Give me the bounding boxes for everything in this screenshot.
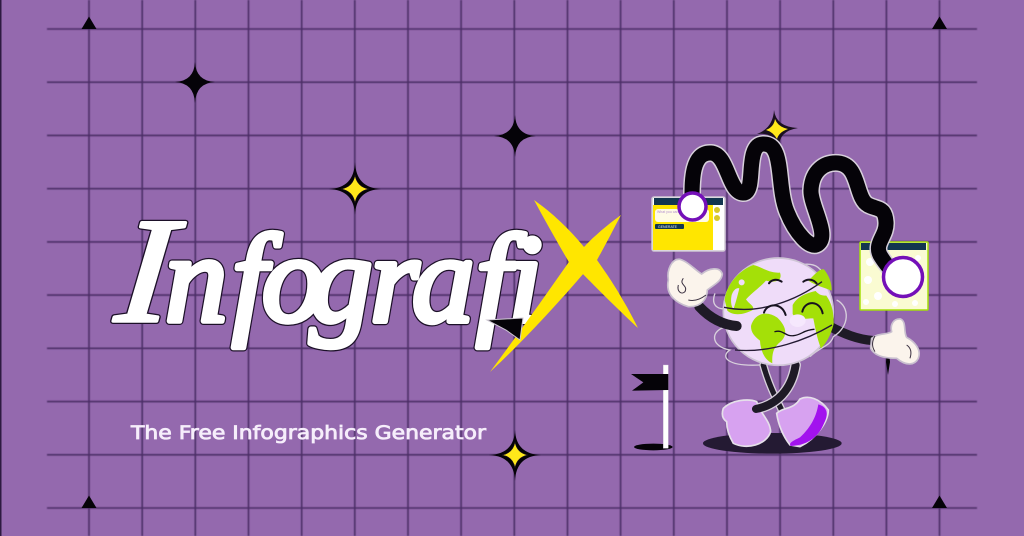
window: right dotted panel — [860, 242, 928, 310]
title: yellow X: X — [479, 93, 690, 428]
window: left yellow prompt: What you can — [657, 210, 678, 214]
tagline: The Free Infographics Generator — [130, 422, 486, 444]
corner triangles — [82, 16, 947, 508]
icon: black sparkle top left — [175, 62, 215, 103]
icon: black sparkle centre — [494, 115, 536, 157]
nose — [790, 314, 806, 327]
bands — [724, 282, 832, 351]
face — [764, 280, 823, 315]
globe character — [668, 258, 919, 454]
title: Infografi: I — [110, 188, 189, 354]
title: Infografi: nfografi — [165, 211, 543, 349]
window: left yellow prompt: GENERATE — [658, 225, 678, 229]
icon: cursor arrow — [487, 318, 523, 340]
front leg — [756, 365, 796, 409]
title: Infografi: I — [110, 188, 189, 354]
cable plug right — [884, 258, 922, 296]
left arm — [699, 307, 737, 326]
left glove — [668, 259, 722, 307]
icon: yellow sparkle lower — [489, 430, 541, 481]
cable plug left — [679, 193, 706, 220]
icon: black sparkle behind right glove — [886, 340, 890, 375]
globe — [723, 258, 833, 365]
right arm — [832, 327, 873, 341]
cable — [692, 144, 892, 272]
mouth — [775, 329, 814, 336]
legs — [756, 365, 796, 413]
right glove — [871, 319, 919, 364]
glove details — [678, 278, 911, 358]
ground shadow — [703, 433, 842, 454]
icon: yellow sparkle upper — [329, 162, 381, 215]
orbit wires — [714, 264, 846, 365]
left shoe — [722, 400, 771, 446]
title: Infografi: nfografi — [165, 211, 543, 349]
continents — [725, 265, 834, 363]
right shoe — [777, 397, 828, 447]
icon: yellow sparkle above cable — [757, 110, 798, 147]
flag — [631, 365, 673, 450]
window: left yellow prompt — [652, 197, 725, 251]
highlights — [731, 279, 829, 309]
